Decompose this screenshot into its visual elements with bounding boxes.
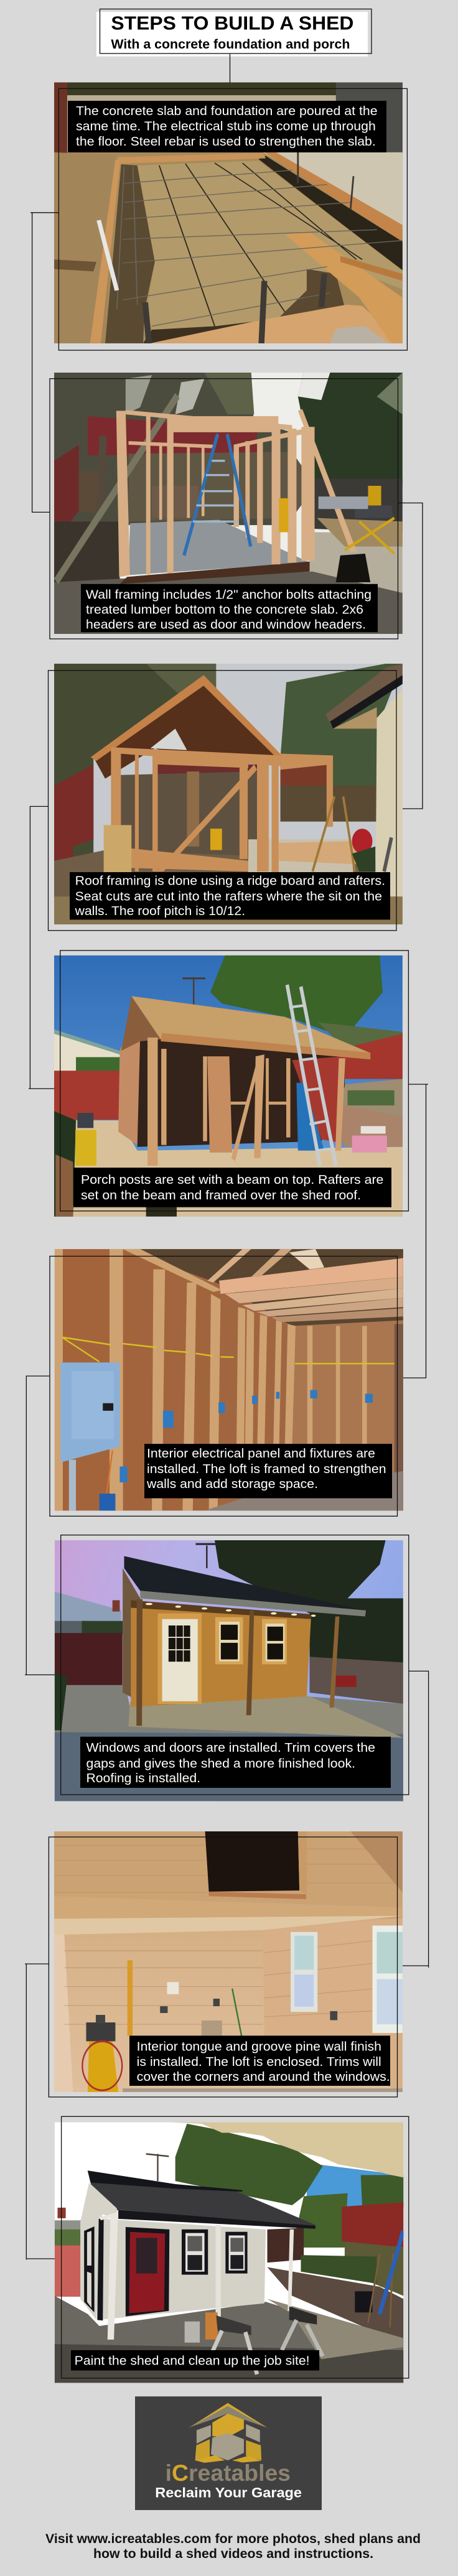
panel: step 5 electrical	[50, 1249, 403, 1516]
photo: rebar and forms for slab	[54, 82, 403, 343]
logo wordmark: iCreatables	[166, 2460, 291, 2486]
frame	[60, 951, 408, 1211]
photo: shed at dusk with lights	[55, 1540, 403, 1801]
footer text	[45, 2532, 421, 2561]
caption: is installed. The loft is enclosed. Trims will	[137, 2055, 381, 2069]
caption	[81, 584, 378, 632]
caption	[70, 872, 390, 919]
caption: set on the beam and framed over the shed roof.	[81, 1188, 361, 1202]
frame	[49, 671, 396, 931]
caption	[68, 101, 386, 152]
caption: treated lumber bottom to the concrete slab. 2x6	[86, 602, 363, 616]
title block	[96, 9, 372, 57]
caption	[80, 1737, 391, 1788]
footer text: Visit www.icreatables.com for more photos, shed plans and	[45, 2532, 421, 2546]
frame	[50, 379, 398, 639]
frame	[50, 1256, 397, 1516]
caption	[71, 2350, 319, 2371]
panel: step 6 doors and windows	[55, 1535, 409, 1801]
caption: Wall framing includes 1/2" anchor bolts attaching	[86, 587, 372, 602]
panel: step 4 porch posts	[54, 951, 408, 1217]
caption	[144, 1444, 392, 1498]
caption: cover the corners and around the windows.	[137, 2070, 390, 2084]
caption: Interior tongue and groove pine wall finish	[137, 2040, 381, 2054]
panel: step 8 finished shed	[55, 2116, 409, 2383]
footer text: how to build a shed videos and instructions.	[93, 2547, 373, 2561]
caption: Porch posts are set with a beam on top. Rafters are	[81, 1173, 383, 1187]
caption: Seat cuts are cut into the rafters where the sit on the	[75, 889, 382, 903]
arrow: step 5 to step 6	[25, 1376, 61, 1675]
frame	[62, 2116, 409, 2378]
caption: walls. The roof pitch is 10/12.	[75, 904, 245, 918]
panel: step 2 wall framing	[50, 373, 403, 639]
arrow: title to step 1	[229, 53, 230, 89]
caption: same time. The electrical stub ins come up through	[76, 119, 376, 134]
photo: wall framing with blue ladder	[54, 373, 403, 634]
caption: Roofing is installed.	[86, 1771, 200, 1785]
icon: house	[189, 2403, 268, 2463]
photo: pine wall interior	[54, 1831, 403, 2093]
panel: step 3 roof framing	[49, 664, 403, 931]
caption: Interior electrical panel and fixtures are	[147, 1446, 375, 1461]
caption	[129, 2035, 390, 2086]
logo: iCreatables	[135, 2396, 322, 2510]
caption: headers are used as door and window headers.	[86, 617, 366, 632]
frame	[49, 1837, 397, 2097]
heading: STEPS TO BUILD A SHED	[111, 12, 353, 34]
caption	[73, 1168, 391, 1207]
caption: Windows and doors are installed. Trim covers the	[86, 1741, 375, 1755]
arrow: step 6 to step 7	[396, 1671, 429, 1968]
frame	[61, 1535, 409, 1795]
panel: step 1 concrete slab	[54, 82, 407, 350]
arrow: step 1 to step 2	[30, 213, 58, 512]
arrow: step 4 to step 5	[397, 1084, 428, 1378]
caption: installed. The loft is framed to strengthen	[147, 1462, 386, 1476]
arrow: step 7 to step 8	[25, 1964, 62, 2259]
caption: The concrete slab and foundation are poured at the	[76, 104, 378, 118]
photo: painted shed	[55, 2123, 403, 2383]
caption: gaps and gives the shed a more finished look.	[86, 1757, 355, 1770]
panel: step 7 tongue and groove	[49, 1831, 403, 2097]
frame	[58, 88, 407, 350]
caption: Paint the shed and clean up the job site!	[75, 2353, 310, 2368]
photo: gable roof rafters	[54, 664, 403, 929]
logo tagline: Reclaim Your Garage	[155, 2485, 302, 2501]
caption: walls and add storage space.	[146, 1477, 318, 1491]
photo: porch posts and beam	[54, 956, 403, 1217]
photo: interior electrical panel	[55, 1249, 403, 1510]
arrow: step 3 to step 4	[29, 806, 60, 1089]
caption: the floor. Steel rebar is used to strengthen the slab.	[76, 134, 376, 149]
arrow: step 2 to step 3	[396, 503, 423, 809]
caption: Roof framing is done using a ridge board and rafters.	[75, 874, 385, 888]
subheading: With a concrete foundation and porch	[111, 37, 350, 52]
